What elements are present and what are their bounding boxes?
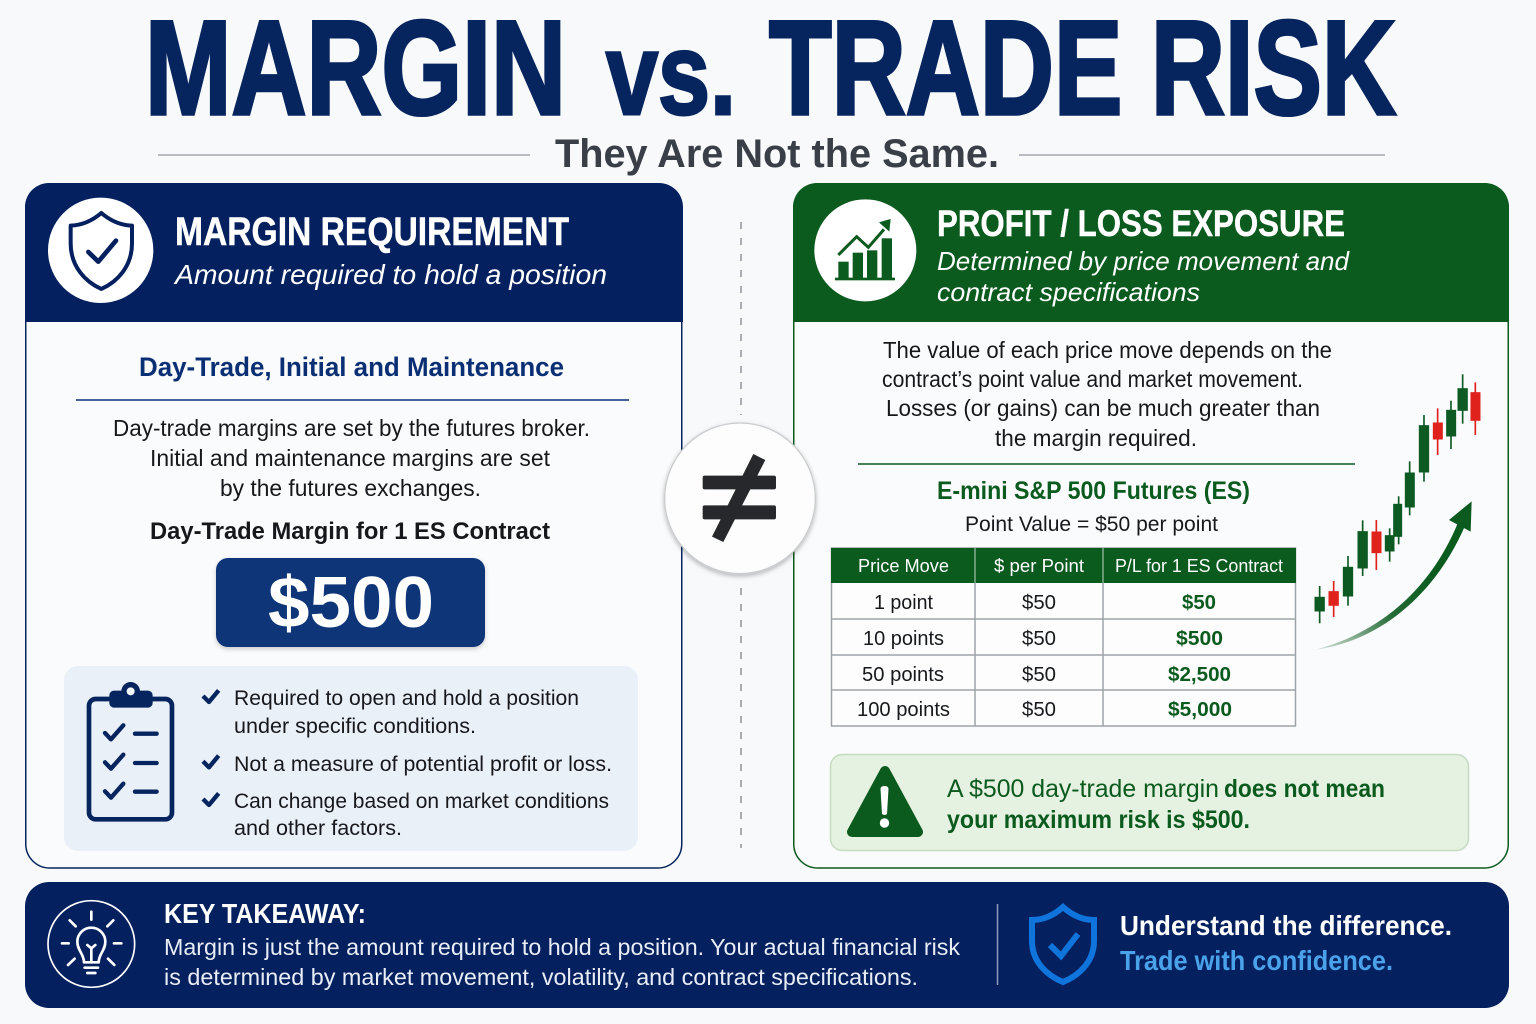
section heading: day-trade, initial and maintenance: Day-Trade, Initial and Maintenance: [139, 352, 564, 382]
table: P/L by price move: $50: [1022, 663, 1056, 686]
subheading: amount required: Amount required to hold a position: [173, 259, 607, 290]
checklist text: [234, 686, 612, 840]
table: P/L by price move: [831, 548, 1296, 726]
value box: $500: $500: [268, 563, 434, 643]
text block: who sets margins: Day-trade margins are set by the futures broker.: [113, 415, 590, 441]
text block: price move explanation: contract’s point value and market movement.: [882, 366, 1303, 392]
closing message: Understand the difference.: [1120, 910, 1452, 941]
section heading: e-mini S&P 500 futures: E-mini S&P 500 Futures (ES): [937, 477, 1250, 505]
table: P/L by price move: $50: [1022, 591, 1056, 614]
callout text: [947, 775, 1385, 834]
panel: margin checklist: [64, 666, 638, 851]
table: P/L by price move: 50 points: [862, 663, 944, 686]
title: vs.: [606, 9, 736, 139]
checklist text: and other factors.: [234, 816, 402, 840]
title: [145, 0, 1396, 143]
table: P/L by price move: 100 points: [857, 698, 950, 721]
heading: key takeaway: KEY TAKEAWAY:: [164, 898, 366, 929]
text block: price move explanation: The value of each price move depends on the: [883, 337, 1332, 363]
point value: Point Value = $50 per point: [965, 512, 1218, 536]
checklist text: under specific conditions.: [234, 714, 476, 738]
subtitle: They Are Not the Same.: [555, 132, 999, 176]
icon: warning triangle: [852, 771, 918, 832]
closing message: [1120, 910, 1452, 976]
table: P/L by price move: $50: [1022, 698, 1056, 721]
table: P/L by price move: $50: [1182, 591, 1216, 614]
closing message: Trade with confidence.: [1120, 945, 1393, 976]
text block: price move explanation: [882, 337, 1332, 451]
subheading: determined by: Determined by price movement and: [937, 246, 1351, 276]
table: P/L by price move: 1 point: [874, 591, 933, 614]
heading: margin requirement: MARGIN REQUIREMENT: [175, 210, 569, 254]
table: P/L by price move: 10 points: [863, 627, 944, 650]
takeaway text: is determined by market movement, volatility, and contract specifications.: [164, 964, 918, 990]
text block: price move explanation: Losses (or gains) can be much greater than: [886, 395, 1320, 421]
icon: blue shield: [1032, 907, 1094, 982]
callout text: A $500 day-trade margin: [947, 775, 1219, 803]
subheading: determined by: contract specifications: [937, 277, 1200, 307]
icon: growth chart: [814, 199, 916, 301]
table: P/L by price move: $2,500: [1168, 663, 1231, 686]
icon: light bulb: [48, 901, 135, 987]
panel header: margin requirement: [25, 183, 683, 322]
checklist text: Not a measure of potential profit or loss.: [234, 752, 612, 776]
label: day-trade margin for 1 ES contract: Day-Trade Margin for 1 ES Contract: [150, 518, 550, 545]
callout text: does not mean: [1224, 775, 1385, 803]
subheading: determined by: [937, 246, 1351, 307]
not-equal badge: [665, 423, 815, 574]
checkmarks: [203, 690, 219, 805]
icon: shield with check: [48, 198, 153, 303]
panel: profit / loss exposure: [793, 183, 1509, 868]
takeaway text: Margin is just the amount required to hold a position. Your actual financial risk: [164, 934, 960, 960]
key takeaway banner: [25, 882, 1509, 1008]
table: P/L by price move: $50: [1022, 627, 1056, 650]
callout text: your maximum risk is $500.: [947, 806, 1250, 834]
panel: margin requirement: [25, 183, 683, 868]
table: P/L by price move: $5,000: [1168, 698, 1232, 721]
arrow: rising trend: [1314, 501, 1472, 650]
heading: profit / loss exposure: PROFIT / LOSS EXPOSURE: [937, 202, 1345, 244]
checklist text: Can change based on market conditions: [234, 789, 609, 813]
table: P/L by price move: $ per Point: [994, 555, 1084, 576]
icon: clipboard: [89, 682, 172, 819]
checklist text: Required to open and hold a position: [234, 686, 579, 710]
value box: $500: [216, 558, 485, 647]
text block: who sets margins: [113, 415, 590, 501]
text block: who sets margins: Initial and maintenance margins are set: [150, 445, 551, 471]
callout: warning: [830, 754, 1468, 850]
table: P/L by price move: P/L for 1 ES Contract: [1115, 555, 1283, 576]
text block: price move explanation: the margin required.: [995, 425, 1197, 451]
panel header: profit / loss exposure: [793, 183, 1509, 322]
table: P/L by price move: Price Move: [858, 555, 949, 576]
center dashed divider: [740, 222, 742, 848]
takeaway text: [164, 934, 960, 990]
chart: rising candlesticks: [1314, 374, 1480, 650]
table: P/L by price move: $500: [1176, 627, 1223, 650]
text block: who sets margins: by the futures exchanges.: [220, 475, 481, 501]
